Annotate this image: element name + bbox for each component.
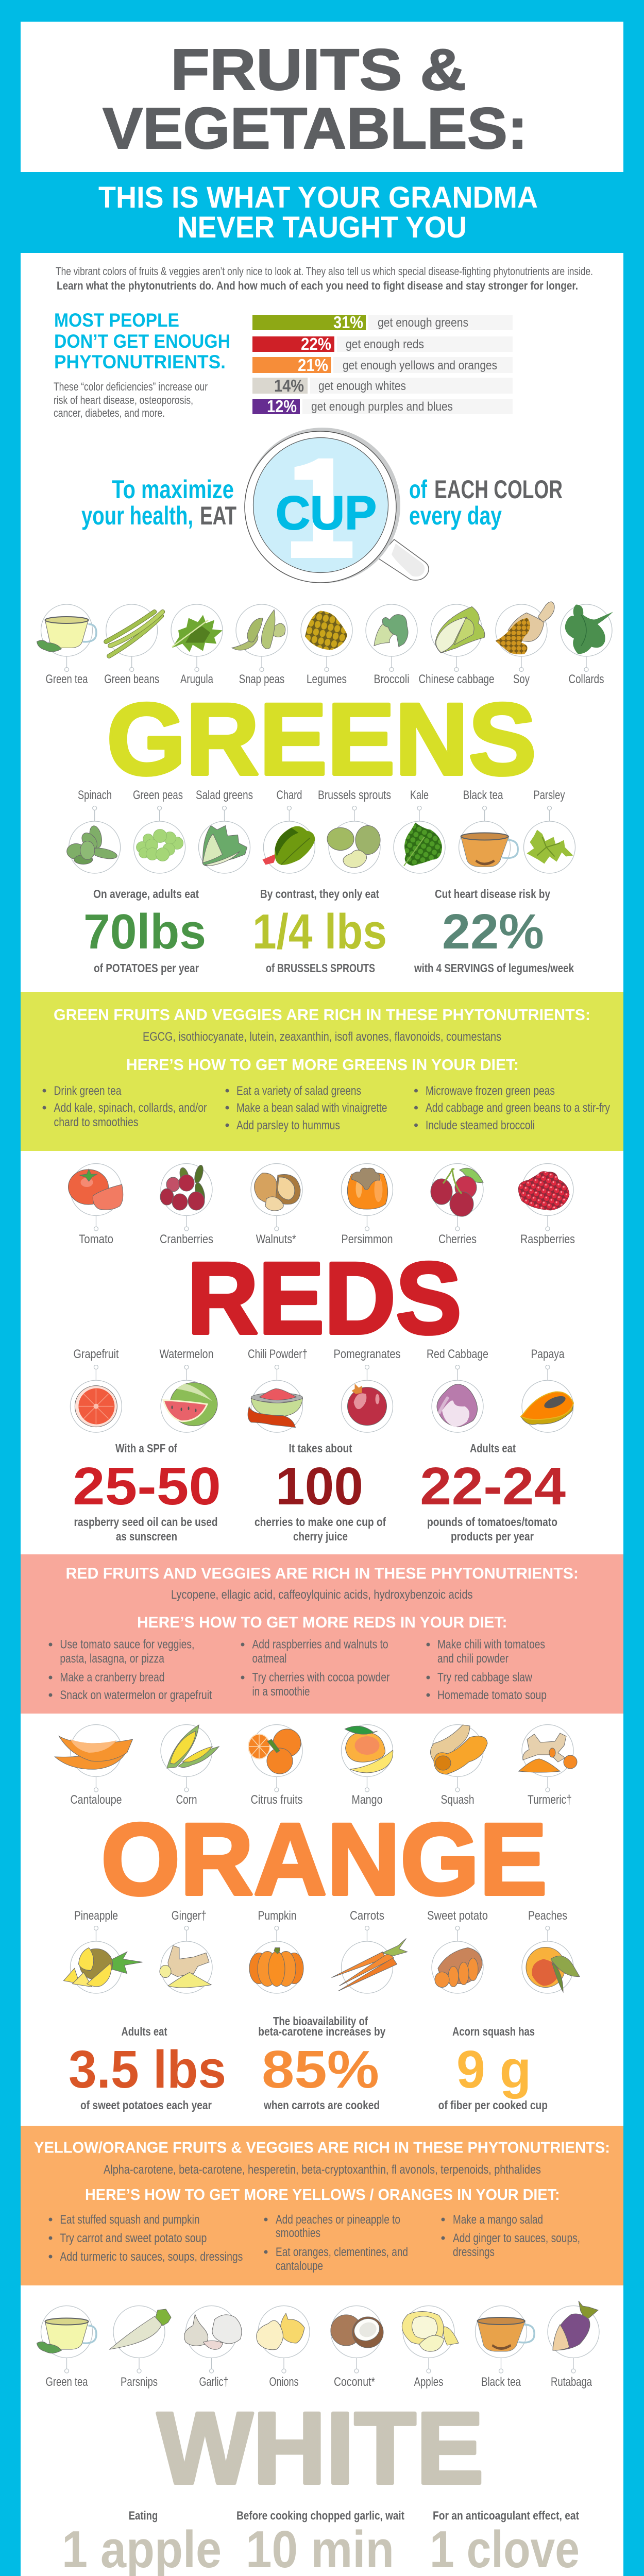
food: black tea	[459, 788, 518, 873]
tips: Make a mango salad	[453, 2213, 543, 2227]
tips: Add ginger to sauces, soups,	[453, 2231, 580, 2245]
stat: 85%: beta-carotene increases by	[258, 2025, 385, 2038]
tips: Homemade tomato soup	[437, 1688, 547, 1702]
food: red cabbage: Red Cabbage	[427, 1347, 488, 1361]
food: chili powder	[248, 1347, 308, 1432]
stat: 3.5 lbs	[69, 2025, 226, 2112]
stats: reds	[73, 1442, 566, 1543]
subtitle	[98, 181, 538, 244]
food: chard	[262, 788, 315, 873]
stat: 70lbs	[83, 887, 206, 975]
food: grapefruit: Grapefruit	[73, 1347, 119, 1361]
food: cherries	[431, 1163, 483, 1246]
tips: Include steamed broccoli	[426, 1118, 535, 1132]
tips: Try carrot and sweet potato soup	[60, 2231, 207, 2245]
bar: purples and blues: 12%	[267, 397, 297, 416]
food: green beans: Green beans	[104, 672, 159, 686]
lede right	[409, 475, 563, 530]
title	[103, 37, 528, 161]
stat: 9 g	[438, 2025, 548, 2112]
big word: REDS: REDS	[187, 1241, 462, 1355]
food: spinach: Spinach	[78, 788, 112, 802]
icon: magnifying glass	[245, 398, 429, 598]
food: walnuts	[251, 1163, 302, 1246]
tips: Snack on watermelon or grapefruit	[60, 1688, 212, 1702]
tips	[48, 2213, 580, 2273]
food: green peas	[133, 788, 185, 873]
bar: whites: get enough whites	[318, 379, 406, 393]
lede right: every day	[409, 501, 502, 530]
food: salad greens: Salad greens	[196, 788, 253, 802]
food row: greens bottom	[67, 788, 575, 873]
food: pomegranates: Pomegranates	[334, 1347, 401, 1361]
bar: greens	[252, 313, 513, 332]
tips: Try red cabbage slaw	[437, 1670, 533, 1685]
stat: 22-24: pounds of tomatoes/tomato	[427, 1515, 557, 1529]
heading: RED FRUITS AND VEGGIES ARE RICH IN THESE PHYTONUTRIENTS:	[66, 1564, 579, 1582]
nutrient list: Alpha-carotene, beta-carotene, hesperetin, beta-cryptoxanthin, fl avonols, terpenoids, phthalides	[104, 2163, 541, 2177]
food row: reds bottom	[70, 1347, 573, 1432]
food: peaches	[522, 1909, 580, 1993]
callout: most people: PHYTONUTRIENTS.	[54, 351, 226, 372]
stat: 3.5 lbs: of sweet potatoes each year	[80, 2098, 212, 2112]
panel: red phytonutrients	[21, 1554, 623, 1714]
food: brussels sprouts: Brussels sprouts	[318, 788, 391, 802]
food: sweet potato: Sweet potato	[427, 1909, 488, 1923]
food row: reds top	[68, 1163, 575, 1246]
stat: 85%: when carrots are cooked	[263, 2098, 380, 2112]
stat: 100: 100	[276, 1456, 363, 1516]
panel: orange phytonutrients	[21, 2126, 623, 2285]
stat: 100: cherry juice	[293, 1530, 348, 1543]
stat: 22-24: 22-24	[420, 1456, 566, 1516]
food: raspberries: Raspberries	[520, 1232, 575, 1246]
bar: purples and blues: get enough purples and blues	[311, 400, 453, 414]
heading: HERE’S HOW TO GET MORE REDS IN YOUR DIET:	[137, 1613, 507, 1631]
food: arugula	[171, 604, 223, 686]
heading: HERE’S HOW TO GET MORE YELLOWS / ORANGES IN YOUR DIET:	[85, 2185, 560, 2204]
big word: GREENS: GREENS	[107, 682, 536, 796]
food: collards: Collards	[569, 672, 604, 686]
tips: Make chili with tomatoes	[437, 1638, 545, 1652]
food: broccoli: Broccoli	[374, 672, 409, 686]
bar chart	[252, 313, 513, 416]
title: VEGETABLES:	[103, 96, 528, 161]
food: kale	[394, 788, 445, 873]
food: squash	[430, 1725, 487, 1807]
food: squash: Squash	[441, 1793, 474, 1807]
food: grapefruit	[70, 1347, 122, 1432]
food: pomegranates	[334, 1347, 401, 1432]
food: carrots	[332, 1909, 407, 1993]
tips: Make a bean salad with vinaigrette	[236, 1101, 387, 1115]
food row: white	[37, 2301, 599, 2389]
food row: orange top	[55, 1725, 577, 1807]
food: chinese cabbage	[418, 604, 495, 686]
food: garlic: Garlic†	[199, 2375, 229, 2389]
lede left: To maximize	[112, 475, 234, 504]
food: salad greens	[196, 788, 253, 873]
stat: 70lbs: On average, adults eat	[93, 887, 199, 901]
stat: 22%: with 4 SERVINGS of legumes/week	[414, 961, 574, 975]
food: collards	[561, 604, 613, 686]
stat: 100	[255, 1442, 386, 1543]
food: mango	[341, 1725, 393, 1807]
food: arugula: Arugula	[180, 672, 213, 686]
tips: Add raspberries and walnuts to	[252, 1638, 388, 1652]
food: pumpkin	[249, 1909, 303, 1993]
food: ginger: Ginger†	[172, 1909, 207, 1923]
tips: Add kale, spinach, collards, and/or	[54, 1101, 207, 1115]
callout: most people	[54, 310, 230, 419]
food: red cabbage	[427, 1347, 488, 1432]
food: rutabaga	[548, 2301, 599, 2389]
icon: magnifying glass: CUP	[276, 487, 377, 539]
tips: Try cherries with cocoa powder	[252, 1670, 390, 1685]
title panel	[21, 22, 623, 172]
stat: 22%	[414, 887, 574, 975]
section: white	[21, 2301, 623, 2576]
stat: 85%	[258, 2014, 385, 2112]
food: legumes	[301, 604, 352, 686]
section: orange	[21, 1725, 623, 2285]
tips: Make a cranberry bread	[60, 1670, 164, 1685]
subtitle: THIS IS WHAT YOUR GRANDMA	[98, 181, 538, 214]
tips: Eat a variety of salad greens	[236, 1084, 361, 1098]
bar: greens: 31%	[333, 313, 363, 332]
food: green tea: Green tea	[45, 672, 88, 686]
food: snap peas: Snap peas	[239, 672, 284, 686]
food: pineapple: Pineapple	[74, 1909, 118, 1923]
food: onions: Onions	[269, 2375, 299, 2389]
food: chard: Chard	[276, 788, 302, 802]
stat: 9 g: Acorn squash has	[452, 2025, 535, 2038]
stat: 22-24: Adults eat	[470, 1442, 516, 1455]
food: parsnips	[110, 2306, 171, 2389]
food: parsley	[523, 788, 575, 873]
tips: and chili powder	[437, 1652, 509, 1666]
food: soy: Soy	[513, 672, 530, 686]
bar: reds: 22%	[301, 334, 331, 353]
food: green tea: Green tea	[45, 2375, 88, 2389]
stat: 22-24: products per year	[451, 1530, 534, 1543]
food: spinach	[67, 788, 121, 873]
food: parsnips: Parsnips	[121, 2375, 158, 2389]
food: snap peas	[232, 604, 287, 686]
callout: most people: DON’T GET ENOUGH	[54, 331, 230, 352]
food row: orange bottom	[64, 1909, 580, 1993]
food: corn	[161, 1725, 219, 1807]
stat: 25-50: With a SPF of	[115, 1442, 177, 1455]
stat: 100: It takes about	[289, 1442, 352, 1455]
heading: HERE’S HOW TO GET MORE GREENS IN YOUR DIET:	[126, 1056, 519, 1074]
callout: most people: These “color deficiencies” increase our	[54, 380, 208, 393]
stat: 25-50: as sunscreen	[116, 1530, 177, 1543]
stat: 9 g: of fiber per cooked cup	[438, 2098, 548, 2112]
tips: Add turmeric to sauces, soups, dressings	[60, 2250, 243, 2264]
stats: orange	[69, 2014, 548, 2112]
stat: 22-24	[420, 1442, 566, 1543]
food: citrus fruits	[248, 1725, 303, 1807]
section: reds	[21, 1163, 623, 1714]
big word: ORANGE: ORANGE	[101, 1802, 547, 1916]
tips: Use tomato sauce for veggies,	[60, 1638, 194, 1652]
tips: Drink green tea	[54, 1084, 122, 1098]
food: turmeric: Turmeric†	[528, 1793, 572, 1807]
food: apples: Apples	[414, 2375, 443, 2389]
intro text	[56, 265, 593, 292]
big word: WHITE: WHITE	[157, 2391, 484, 2505]
subtitle: NEVER TAUGHT YOU	[177, 211, 467, 244]
bar: whites: 14%	[274, 376, 304, 395]
food: raspberries	[518, 1163, 575, 1246]
stat: 10 min: Before cooking chopped garlic, wait	[236, 2509, 404, 2522]
food: tomato	[68, 1163, 123, 1246]
food: watermelon	[160, 1347, 217, 1432]
food: green tea	[37, 2306, 96, 2389]
tips: Eat oranges, clementines, and	[276, 2245, 408, 2259]
food: kale: Kale	[410, 788, 429, 802]
tips: Add parsley to hummus	[236, 1118, 340, 1132]
stat: 25-50: raspberry seed oil can be used	[74, 1515, 217, 1529]
food: watermelon: Watermelon	[160, 1347, 213, 1361]
food: brussels sprouts	[318, 788, 391, 873]
lede right: of	[409, 475, 427, 504]
bar: reds	[252, 334, 513, 353]
stat: 1 clove: For an anticoagulant effect, eat	[433, 2509, 579, 2522]
food: onions	[257, 2306, 310, 2389]
lede left: your health,	[81, 501, 193, 530]
intro text: Learn what the phytonutrients do. And how much of each you need to fight disease and stay stronger for longer.	[57, 279, 578, 292]
food: mango: Mango	[351, 1793, 382, 1807]
food: sweet potato	[427, 1909, 488, 1993]
stat: 22%: 22%	[442, 904, 544, 959]
stat: 3.5 lbs: 3.5 lbs	[69, 2040, 226, 2099]
stat: 9 g: 9 g	[456, 2040, 531, 2099]
food: peaches: Peaches	[528, 1909, 567, 1923]
food row: greens top	[37, 602, 613, 686]
tips	[42, 1084, 610, 1132]
stat: 3.5 lbs: Adults eat	[122, 2025, 167, 2038]
food: cantaloupe: Cantaloupe	[70, 1793, 122, 1807]
stat: 1/4 lbs	[252, 887, 387, 975]
food: cantaloupe	[55, 1725, 133, 1807]
stat: 1 apple: Eating	[129, 2509, 158, 2522]
stat: 1/4 lbs: of BRUSSELS SPROUTS	[266, 961, 375, 975]
food: cranberries: Cranberries	[160, 1232, 213, 1246]
title: FRUITS &	[171, 37, 466, 102]
food: chili powder: Chili Powder†	[248, 1347, 308, 1361]
food: corn: Corn	[176, 1793, 197, 1807]
food: persimmon	[341, 1163, 393, 1246]
food: papaya	[521, 1347, 573, 1432]
food: citrus fruits: Citrus fruits	[250, 1793, 303, 1807]
food: rutabaga: Rutabaga	[551, 2375, 592, 2389]
food: carrots: Carrots	[350, 1909, 384, 1923]
bar: purples and blues	[252, 397, 513, 416]
callout: eat 1 cup of each color	[81, 398, 563, 598]
stats: greens	[83, 887, 574, 975]
food: legumes: Legumes	[307, 672, 347, 686]
stat: 85%: The bioavailability of	[273, 2014, 368, 2028]
bar: whites	[252, 376, 513, 395]
food: garlic	[184, 2306, 242, 2389]
stat: 25-50: 25-50	[73, 1456, 221, 1516]
stat: 1/4 lbs: By contrast, they only eat	[260, 887, 379, 901]
bar: yellows and oranges: get enough yellows and oranges	[343, 359, 497, 372]
tips: Microwave frozen green peas	[426, 1084, 555, 1098]
callout: most people: MOST PEOPLE	[54, 310, 179, 331]
stat: 70lbs: 70lbs	[83, 904, 206, 959]
food: apples	[402, 2306, 459, 2389]
food: black tea	[475, 2306, 534, 2389]
food: cranberries	[160, 1163, 213, 1246]
food: green peas: Green peas	[133, 788, 183, 802]
bar: yellows and oranges	[252, 355, 513, 375]
food: walnuts: Walnuts*	[256, 1232, 296, 1246]
lede left	[81, 475, 236, 530]
food: tomato: Tomato	[79, 1232, 113, 1246]
food: black tea: Black tea	[463, 788, 503, 802]
lede right: EACH COLOR	[434, 475, 563, 504]
tips: in a smoothie	[252, 1685, 310, 1699]
tips: Eat stuffed squash and pumpkin	[60, 2213, 199, 2227]
heading: YELLOW/ORANGE FRUITS & VEGGIES ARE RICH IN THESE PHYTONUTRIENTS:	[34, 2139, 610, 2157]
stat: 1/4 lbs: 1/4 lbs	[252, 904, 387, 959]
tips: dressings	[453, 2245, 495, 2259]
bar: greens: get enough greens	[378, 316, 468, 330]
heading: GREEN FRUITS AND VEGGIES ARE RICH IN THESE PHYTONUTRIENTS:	[54, 1006, 590, 1024]
food: black tea: Black tea	[481, 2375, 521, 2389]
food: green tea	[37, 604, 96, 686]
callout: most people: risk of heart disease, osteoporosis,	[54, 394, 193, 406]
lede left: EAT	[200, 501, 236, 530]
food: turmeric	[519, 1725, 577, 1807]
food: pineapple	[64, 1909, 142, 1993]
tips: Add peaches or pineapple to	[276, 2213, 400, 2227]
stat: 70lbs: of POTATOES per year	[94, 961, 199, 975]
food: soy	[496, 602, 554, 686]
food: cherries: Cherries	[438, 1232, 477, 1246]
tips: pasta, lasagna, or pizza	[60, 1652, 164, 1666]
food: persimmon: Persimmon	[341, 1232, 393, 1246]
panel: green phytonutrients	[21, 992, 623, 1151]
food: chinese cabbage: Chinese cabbage	[418, 672, 495, 686]
callout: most people: cancer, diabetes, and more.	[54, 406, 165, 419]
food: ginger	[160, 1909, 212, 1993]
food: parsley: Parsley	[534, 788, 565, 802]
tips: cantaloupe	[276, 2259, 323, 2273]
stat: 85%: 85%	[262, 2040, 379, 2099]
food: pumpkin: Pumpkin	[258, 1909, 297, 1923]
icon: magnifying glass: 1	[280, 398, 361, 598]
food: coconut	[331, 2306, 383, 2389]
tips: chard to smoothies	[54, 1115, 138, 1129]
tips: smoothies	[276, 2226, 320, 2240]
bar: yellows and oranges: 21%	[298, 355, 328, 375]
bar: reds: get enough reds	[346, 337, 424, 351]
stats: white	[62, 2509, 580, 2576]
stat: 100: cherries to make one cup of	[255, 1515, 386, 1529]
food: papaya: Papaya	[531, 1347, 565, 1361]
nutrient list: EGCG, isothiocyanate, lutein, zeaxanthin, isofl avones, flavonoids, coumestans	[143, 1030, 501, 1044]
food: broccoli	[366, 604, 417, 686]
nutrient list: Lycopene, ellagic acid, caffeoylquinic acids, hydroxybenzoic acids	[171, 1588, 473, 1602]
stat: 25-50	[73, 1442, 221, 1543]
food: coconut: Coconut*	[334, 2375, 375, 2389]
food: green beans	[104, 604, 163, 686]
section: greens	[21, 602, 623, 1151]
tips	[48, 1638, 547, 1702]
tips: oatmeal	[252, 1652, 286, 1666]
stat: 22%: Cut heart disease risk by	[435, 887, 550, 901]
